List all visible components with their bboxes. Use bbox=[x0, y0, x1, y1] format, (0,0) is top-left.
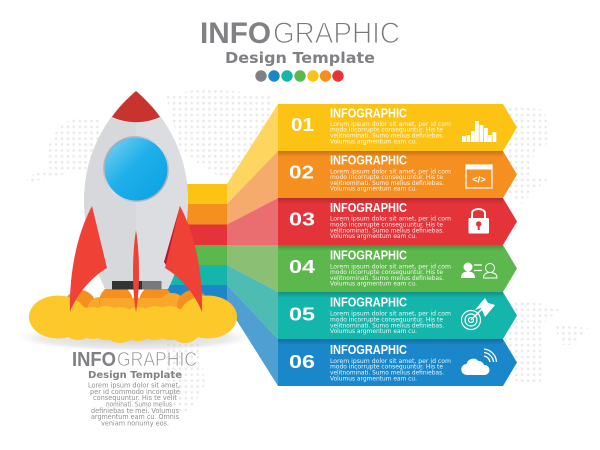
lower block paragraph: definiebas te mei. Volumus bbox=[91, 407, 179, 415]
background world map dots bbox=[27, 90, 590, 412]
lower block paragraph: Lorem ipsum dolor sit amet, bbox=[88, 382, 180, 390]
title: INFO bbox=[200, 17, 271, 50]
colour dots bbox=[255, 70, 344, 82]
bar 05: modo incorrupte consequuntur. His te bbox=[330, 316, 443, 323]
bar 06: velitnominati. Sumo melius definiebas. bbox=[330, 370, 444, 377]
icon: target with arrow bbox=[462, 298, 495, 330]
rocket exhaust: yellow clouds bbox=[29, 296, 237, 343]
rocket bbox=[70, 91, 202, 312]
bar 01: modo incorrupte consequuntur. His te bbox=[330, 127, 443, 134]
bar 01 bbox=[278, 104, 517, 151]
bar 04: 04 bbox=[289, 256, 316, 277]
title: GRAPHIC bbox=[273, 17, 400, 50]
porthole window bbox=[103, 136, 169, 202]
left fin bbox=[70, 206, 107, 312]
icon: bar chart bbox=[462, 121, 496, 142]
bar 05: Lorem ipsum dolor sit amet, per id com bbox=[330, 311, 451, 318]
bar 03: 03 bbox=[289, 208, 315, 230]
bar 06: Lorem ipsum dolor sit amet, per id com bbox=[330, 358, 451, 365]
bar 04: modo incorrupte consequuntur. His te bbox=[330, 269, 443, 276]
bar 06: 06 bbox=[289, 351, 315, 372]
bar 02 bbox=[278, 151, 517, 198]
title bbox=[200, 17, 400, 50]
nose cone bbox=[112, 91, 160, 122]
fan connecting strips to bars bbox=[227, 104, 278, 386]
icon: code window bbox=[466, 165, 492, 188]
bar 02: Volumus argmentum eam cu. bbox=[330, 186, 417, 193]
icon: code window: </> bbox=[472, 174, 486, 186]
bar 03 bbox=[278, 198, 517, 245]
bar 06: Volumus argmentum eam cu. bbox=[330, 375, 417, 382]
bar 06: modo incorrupte consequuntur. His te bbox=[330, 364, 443, 371]
bar 02: INFOGRAPHIC bbox=[330, 154, 407, 168]
bar 04: velitnominati. Sumo melius definiebas. bbox=[330, 275, 444, 282]
lower block heading: GRAPHIC bbox=[117, 349, 197, 371]
rocket body bbox=[84, 91, 188, 289]
icon: two people exchanging bbox=[461, 262, 497, 278]
bar 01: 01 bbox=[291, 114, 314, 135]
bar 02: velitnominati. Sumo melius definiebas. bbox=[330, 180, 444, 187]
bar 02: 02 bbox=[289, 162, 314, 182]
lower block heading bbox=[72, 349, 197, 371]
bar 06 bbox=[278, 339, 517, 386]
bar 04: Volumus argmentum eam cu. bbox=[330, 280, 417, 288]
colour strips behind rocket bbox=[150, 184, 227, 306]
bar 02: modo incorrupte consequuntur. His te bbox=[330, 174, 443, 181]
bar 03: Lorem ipsum dolor sit amet, per id com bbox=[330, 216, 451, 223]
lower block heading: INFO bbox=[72, 349, 116, 371]
lower block paragraph: argmentum eam cu. Omnis bbox=[91, 413, 179, 421]
bar 04 bbox=[278, 245, 517, 292]
bar 01: Lorem ipsum dolor sit amet, per id com bbox=[330, 121, 451, 128]
bar 01: INFOGRAPHIC bbox=[330, 106, 407, 120]
bar 05: INFOGRAPHIC bbox=[330, 296, 407, 310]
lower block paragraph bbox=[88, 382, 180, 427]
fin shadow bbox=[164, 206, 186, 268]
bar 04: INFOGRAPHIC bbox=[330, 248, 407, 262]
bar 01: velitnominati. Sumo melius definiebas. bbox=[330, 133, 444, 140]
bar 04: Lorem ipsum dolor sit amet, per id com bbox=[330, 263, 451, 270]
bar 03: modo incorrupte consequuntur. His te bbox=[330, 221, 443, 228]
bar 05: velitnominati. Sumo melius definiebas. bbox=[330, 322, 444, 329]
icon: cloud with signal bbox=[461, 349, 496, 375]
bar 02: Lorem ipsum dolor sit amet, per id com bbox=[330, 168, 451, 175]
rocket exhaust: orange flames bbox=[64, 285, 209, 323]
lower block paragraph: nominati. Sumo melius bbox=[106, 400, 172, 408]
bar 05: 05 bbox=[289, 304, 315, 325]
bar 03: INFOGRAPHIC bbox=[330, 201, 407, 215]
bar 05: Volumus argmentum eam cu. bbox=[330, 328, 417, 335]
right fin bbox=[165, 206, 202, 312]
lower block paragraph: consequuntur. His te velit bbox=[93, 394, 177, 402]
lower block paragraph: per id commodo incorrupte bbox=[90, 388, 180, 396]
bar 03: velitnominati. Sumo melius definiebas. bbox=[330, 227, 444, 234]
bar 05 bbox=[278, 292, 517, 339]
icon: padlock bbox=[468, 209, 489, 234]
lower block subtitle: Design Template bbox=[88, 370, 182, 381]
nozzle bbox=[112, 281, 162, 290]
bar 06: INFOGRAPHIC bbox=[330, 343, 407, 357]
ground shadow bbox=[17, 325, 253, 351]
centre fin bbox=[133, 230, 139, 312]
lower block paragraph: veniam nonumy eos. bbox=[101, 419, 169, 427]
bar 01: Volumus argmentum eam cu. bbox=[330, 138, 417, 145]
subtitle: Design Template bbox=[225, 49, 375, 67]
bar 03: Volumus argmentum eam cu. bbox=[330, 233, 417, 240]
